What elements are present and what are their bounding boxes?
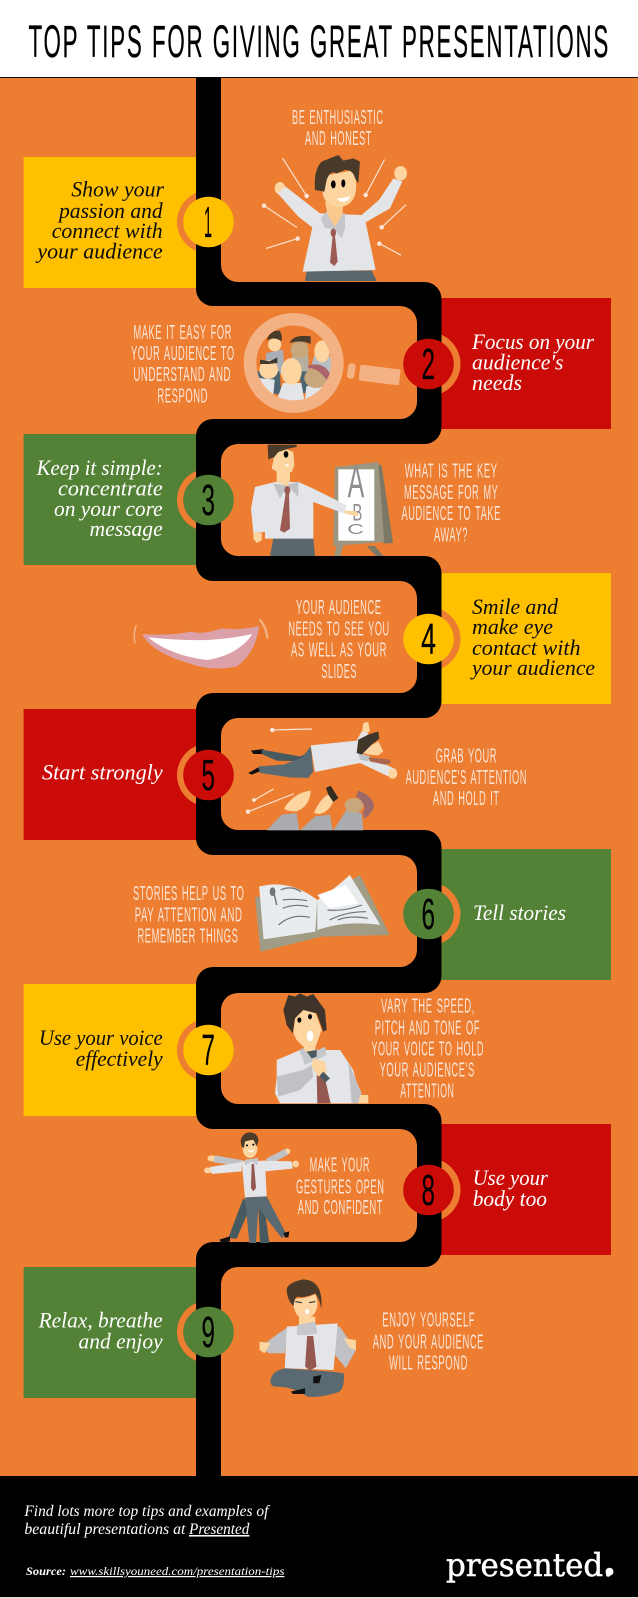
number badge 9 <box>183 1307 234 1357</box>
number badge 4: 4 <box>421 615 436 664</box>
infographic canvas: AUDIENCE TO TAKE <box>402 503 501 525</box>
panel: tip 3 keep it simple: on your core <box>54 496 163 521</box>
panel: tip 9 relax: and enjoy <box>78 1328 163 1353</box>
number badge 6 <box>403 889 454 939</box>
panel: tip 4 smile: contact with <box>472 635 580 660</box>
panel: tip 2 focus on audience: needs <box>472 370 522 395</box>
infographic canvas: WHAT IS THE KEY <box>405 461 498 483</box>
caption 4: SLIDES <box>321 661 357 683</box>
panel: tip 1 show your passion: passion and <box>57 198 164 223</box>
panel: tip 3 keep it simple: concentrate <box>58 475 163 500</box>
caption 5 <box>406 745 527 810</box>
icon: meditating man <box>260 1279 356 1397</box>
number halos <box>177 190 460 1364</box>
infographic canvas: STORIES HELP US TO <box>133 883 244 905</box>
number badge 2 <box>403 339 454 389</box>
caption 8 <box>296 1155 384 1219</box>
number badge 5 <box>183 750 234 800</box>
panel: tip 8 use your body: Use your <box>473 1165 548 1190</box>
infographic canvas: BE ENTHUSIASTIC <box>292 107 384 129</box>
panel: tip 6 tell stories <box>439 849 611 980</box>
panel: tip 5 start strongly <box>24 709 199 840</box>
caption 4: YOUR AUDIENCE <box>296 597 382 619</box>
infographic canvas: MAKE IT EASY FOR <box>133 322 232 344</box>
panel: tip 4 smile: Smile and <box>472 594 559 619</box>
panel: tip 4 smile: your audience <box>470 655 595 680</box>
footer text: find more tips: Find lots more top tips and examples of <box>23 1503 271 1520</box>
panel: tip 3 keep it simple: Keep it simple: <box>36 455 163 480</box>
caption 7: YOUR AUDIENCE'S <box>380 1060 475 1082</box>
infographic canvas: AND YOUR AUDIENCE <box>373 1331 484 1353</box>
panel: tip 9 relax <box>24 1267 199 1398</box>
number badge 2: 2 <box>422 340 435 389</box>
panel: tip 1 show your passion <box>24 157 199 288</box>
infographic canvas: UNDERSTAND AND <box>133 364 231 386</box>
infographic canvas: REMEMBER THINGS <box>138 925 238 947</box>
panel: tip 8 use your body <box>439 1124 611 1255</box>
icon: smiling mouth <box>134 619 267 668</box>
icon: man with open gestures <box>204 1132 299 1243</box>
panel: tip 6 tell stories: Tell stories <box>473 900 566 925</box>
caption 6 <box>133 883 244 947</box>
caption 7: ATTENTION <box>400 1081 454 1103</box>
icon: presenter at ABC flip chart: A <box>348 456 364 507</box>
panel: tip 4 smile: make eye <box>472 614 553 639</box>
number badge 1 <box>183 197 234 247</box>
icon: man speaking into microphone <box>275 993 368 1103</box>
number badge 8 <box>403 1165 454 1215</box>
infographic canvas: PITCH AND TONE OF <box>375 1017 480 1039</box>
footer text: source: www.skillsyouneed.com/presentation-tips <box>70 1564 285 1578</box>
caption 2 <box>131 322 235 407</box>
caption 4 <box>288 597 390 683</box>
icon: magnifying glass over audience <box>250 319 401 407</box>
winding road <box>196 77 442 1480</box>
caption 5: AND HOLD IT <box>433 788 500 810</box>
number badge 7: 7 <box>202 1026 215 1075</box>
number badge 7 <box>183 1025 234 1075</box>
icon: presenter at ABC flip chart: C <box>347 522 365 538</box>
footer text: find more tips <box>23 1503 271 1538</box>
caption 1 <box>292 107 384 150</box>
caption 5: GRAB YOUR <box>436 745 497 767</box>
infographic canvas: AS WELL AS YOUR <box>291 639 387 661</box>
infographic canvas: MESSAGE FOR MY <box>404 482 498 504</box>
caption 3 <box>402 461 501 547</box>
panel: tip 2 focus on audience: audience's <box>472 349 564 374</box>
number badge 5: 5 <box>202 751 215 800</box>
number badge 3 <box>183 475 234 525</box>
number badge 8: 8 <box>422 1166 435 1215</box>
panel: tip 5 start strongly: Start strongly <box>42 760 163 785</box>
panel: tip 3 keep it simple: message <box>90 516 163 541</box>
icon: presenter at ABC flip chart: B <box>352 500 362 527</box>
panel: tip 7 use your voice: effectively <box>76 1046 163 1071</box>
number badge 1: 1 <box>204 198 212 247</box>
infographic canvas: NEEDS TO SEE YOU <box>288 619 390 641</box>
footer text: find more tips: Presented <box>188 1521 250 1538</box>
panel: tip 1 show your passion: Show your <box>71 177 164 202</box>
panel: tip 2 focus on audience: Focus on your <box>471 329 594 354</box>
caption 8: MAKE YOUR <box>310 1155 370 1177</box>
caption 3: AWAY? <box>434 525 468 547</box>
icon: presenter at ABC flip chart <box>251 445 393 556</box>
icon: enthusiastic man <box>262 155 407 281</box>
panel: tip 7 use your voice: Use your voice <box>39 1025 163 1050</box>
number badge 6: 6 <box>422 890 435 939</box>
caption 1: AND HONEST <box>305 128 372 150</box>
panel: tip 4 smile <box>439 573 611 704</box>
footer text: find more tips: beautiful presentations at <box>24 1521 186 1538</box>
panel: tip 7 use your voice <box>24 984 199 1116</box>
panel: tip 1 show your passion: connect with <box>52 218 163 243</box>
panel: tip 3 keep it simple <box>24 434 199 565</box>
caption 9: WILL RESPOND <box>389 1352 468 1374</box>
number badge 9: 9 <box>202 1308 215 1357</box>
panel: tip 1 show your passion: your audience <box>35 238 163 263</box>
panel: tip 8 use your body: body too <box>473 1186 547 1211</box>
icon: flying man over audience <box>246 722 397 830</box>
caption 9 <box>373 1310 484 1374</box>
icon: open book <box>255 875 390 952</box>
logo: presented: presented. <box>446 1546 613 1584</box>
caption 9: ENJOY YOURSELF <box>382 1310 475 1332</box>
infographic canvas: GESTURES OPEN <box>296 1176 384 1198</box>
caption 7 <box>371 996 484 1103</box>
panel: tip 2 focus on audience <box>439 298 611 429</box>
panel: tip 9 relax: Relax, breathe <box>38 1307 163 1332</box>
caption 2: RESPOND <box>157 385 208 407</box>
number badge 3: 3 <box>202 476 215 525</box>
footer text: source: Source: <box>26 1564 66 1578</box>
infographic canvas: PAY ATTENTION AND <box>135 905 242 927</box>
infographic canvas: YOUR AUDIENCE TO <box>131 343 235 365</box>
infographic canvas: YOUR VOICE TO HOLD <box>371 1038 484 1060</box>
number badge 4 <box>403 614 454 664</box>
footer band <box>0 1476 638 1598</box>
infographic canvas: AND CONFIDENT <box>298 1197 383 1219</box>
caption 7: VARY THE SPEED, <box>381 996 475 1018</box>
